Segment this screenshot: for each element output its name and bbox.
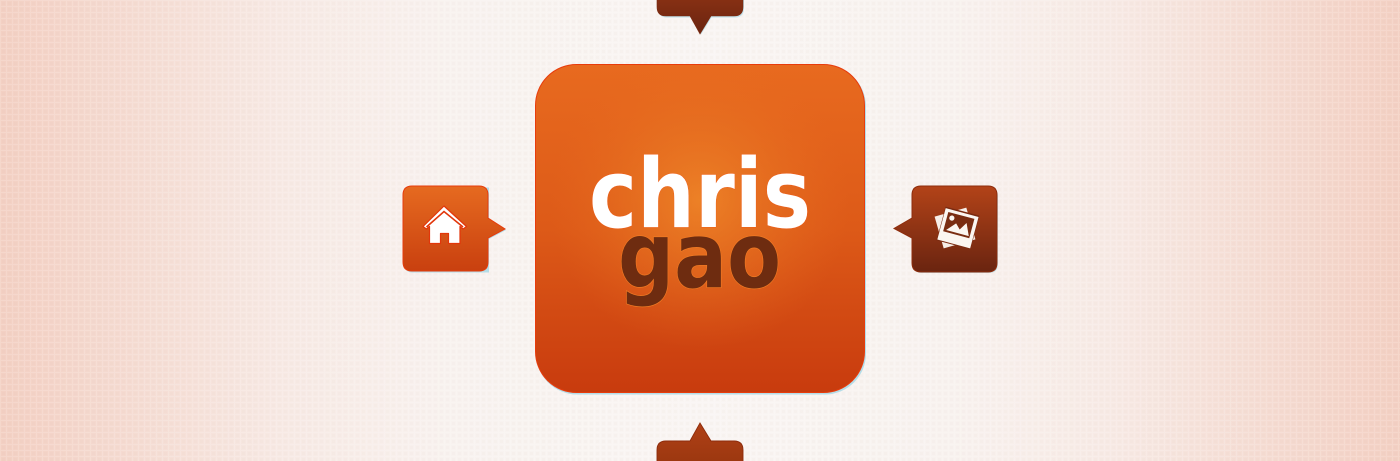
logo word: gao: gao	[618, 204, 781, 309]
bubble shadow edge	[895, 188, 998, 273]
left home speech bubble	[403, 186, 506, 272]
icon: house	[423, 206, 466, 244]
bubble shadow edge	[404, 188, 506, 272]
tile shadow edge	[536, 66, 866, 394]
bubble body	[894, 186, 997, 272]
logo word: chris: chris	[589, 140, 811, 250]
bubble body	[403, 186, 505, 271]
main orange logo tile	[536, 64, 866, 394]
top speech bubble tab	[657, 0, 744, 34]
bottom speech bubble tab	[657, 423, 743, 461]
right photos speech bubble	[894, 186, 998, 273]
tile body	[536, 64, 864, 392]
tile center glow	[536, 65, 864, 392]
icon: stacked photos	[935, 207, 979, 249]
